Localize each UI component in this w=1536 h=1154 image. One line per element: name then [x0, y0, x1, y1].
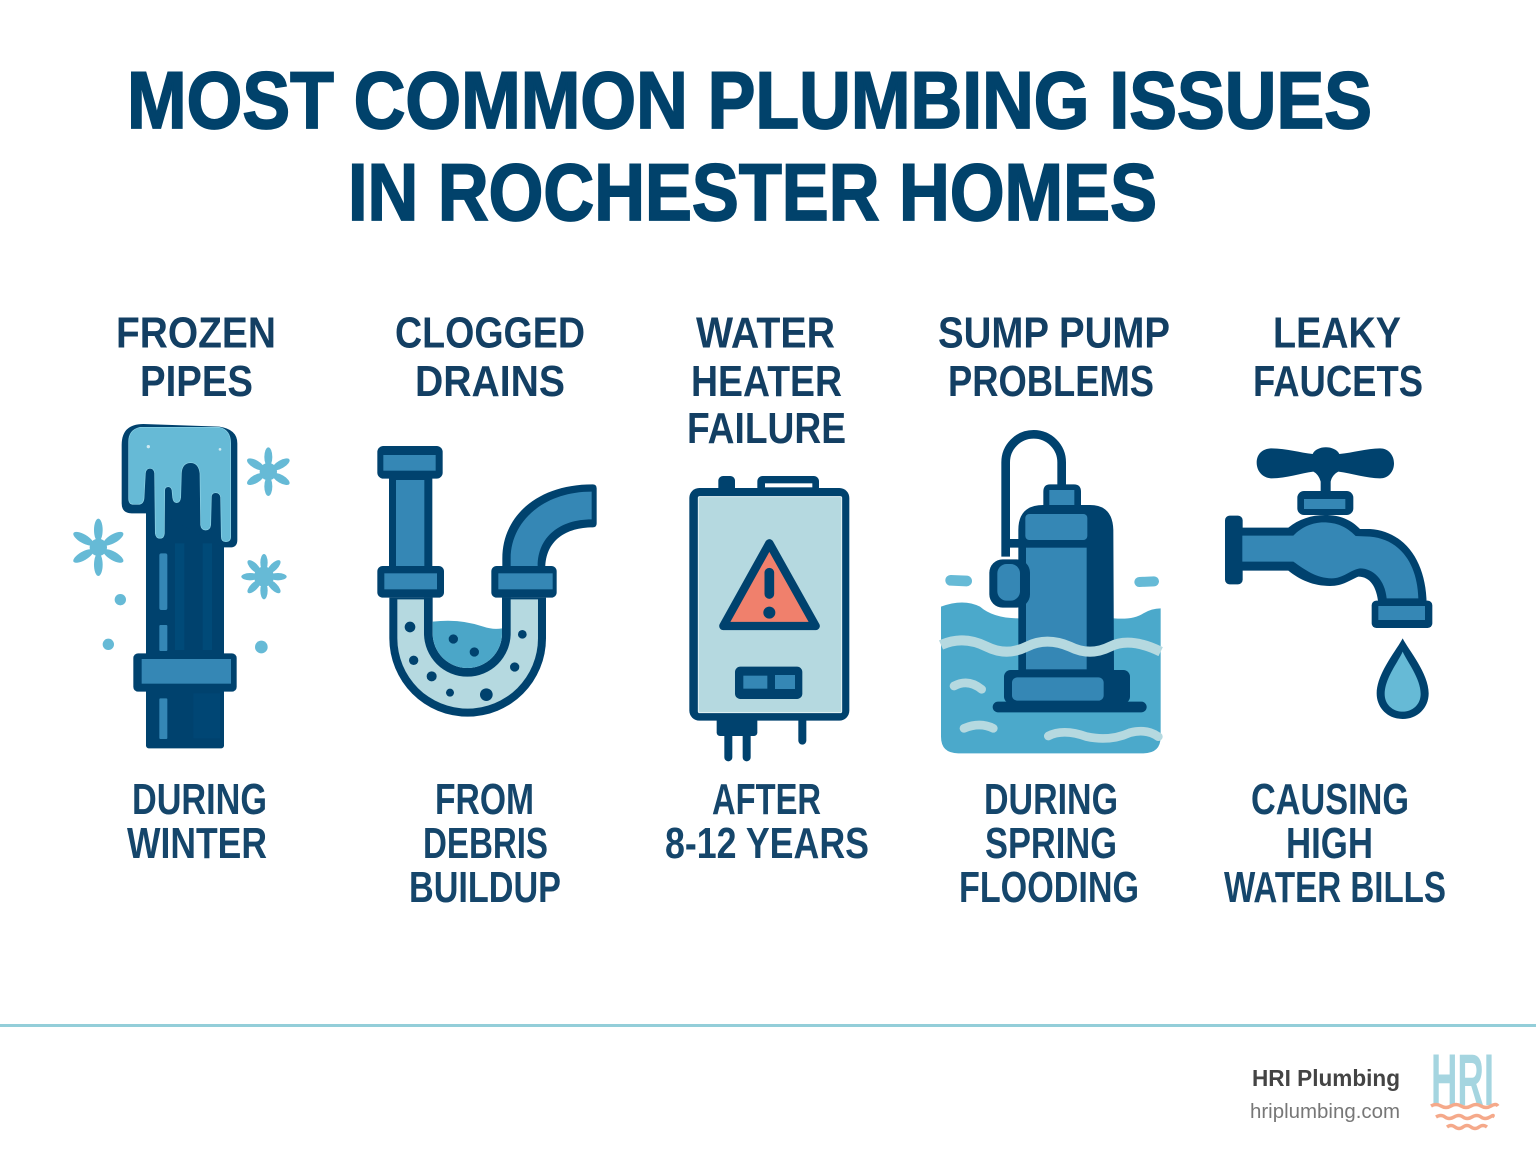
caption: from debris buildup: BUILDUP — [409, 863, 561, 912]
caption: from debris buildup — [409, 775, 561, 912]
heading: sump pump problems: SUMP PUMP — [938, 308, 1170, 358]
caption: during spring flooding: FLOODING — [959, 863, 1139, 912]
heading: water heater failure — [687, 308, 846, 453]
column: clogged drains — [377, 308, 597, 912]
heading: frozen pipes: FROZEN — [116, 308, 276, 358]
column: water heater failure — [665, 308, 869, 868]
icon: clogged p-trap — [377, 446, 597, 717]
footer brand text — [1250, 1065, 1400, 1123]
icon: submerged sump pump — [941, 434, 1161, 753]
caption: during spring flooding: SPRING — [985, 819, 1117, 868]
column: leaky faucets — [1224, 308, 1446, 912]
column: frozen pipes — [71, 308, 291, 868]
caption: after 8-12 years: AFTER — [712, 775, 821, 824]
heading: clogged drains — [395, 308, 585, 406]
caption: from debris buildup: DEBRIS — [423, 819, 548, 868]
heading: sump pump problems — [938, 308, 1170, 406]
heading: leaky faucets — [1253, 308, 1423, 406]
heading: frozen pipes — [116, 308, 276, 406]
caption: from debris buildup: FROM — [435, 775, 534, 824]
heading: water heater failure: WATER — [696, 308, 835, 358]
caption: causing high water bills: WATER BILLS — [1224, 863, 1446, 912]
heading: water heater failure: HEATER — [691, 357, 842, 406]
caption: causing high water bills: HIGH — [1286, 819, 1373, 868]
caption: after 8-12 years — [665, 775, 869, 868]
caption: after 8-12 years: 8-12 YEARS — [665, 819, 869, 868]
heading: frozen pipes: PIPES — [140, 357, 253, 406]
title: MOST COMMON PLUMBING ISSUES — [127, 56, 1372, 146]
column: sump pump problems — [938, 308, 1170, 912]
caption: during spring flooding — [959, 775, 1139, 912]
logo: HRI with waves — [1431, 1040, 1498, 1128]
icon: dripping faucet — [1225, 447, 1432, 719]
footer brand text: hriplumbing.com — [1250, 1101, 1400, 1123]
caption: during spring flooding: DURING — [984, 775, 1118, 824]
caption: during winter: WINTER — [127, 819, 267, 868]
heading: water heater failure: FAILURE — [687, 404, 846, 453]
footer divider — [0, 1024, 1536, 1027]
icon: frozen pipe with snowflakes — [71, 424, 291, 748]
heading: leaky faucets: LEAKY — [1273, 308, 1401, 358]
heading: leaky faucets: FAUCETS — [1253, 357, 1423, 406]
caption: causing high water bills: CAUSING — [1251, 775, 1409, 824]
heading: sump pump problems: PROBLEMS — [948, 357, 1154, 406]
caption: during winter — [127, 775, 267, 868]
title: IN ROCHESTER HOMES — [348, 148, 1157, 238]
title — [127, 56, 1372, 238]
caption: causing high water bills — [1224, 775, 1446, 912]
icon: water heater with warning triangle — [689, 476, 849, 757]
caption: during winter: DURING — [132, 775, 267, 824]
heading: clogged drains: DRAINS — [415, 357, 565, 406]
footer brand text: HRI Plumbing — [1252, 1065, 1400, 1091]
heading: clogged drains: CLOGGED — [395, 308, 585, 358]
